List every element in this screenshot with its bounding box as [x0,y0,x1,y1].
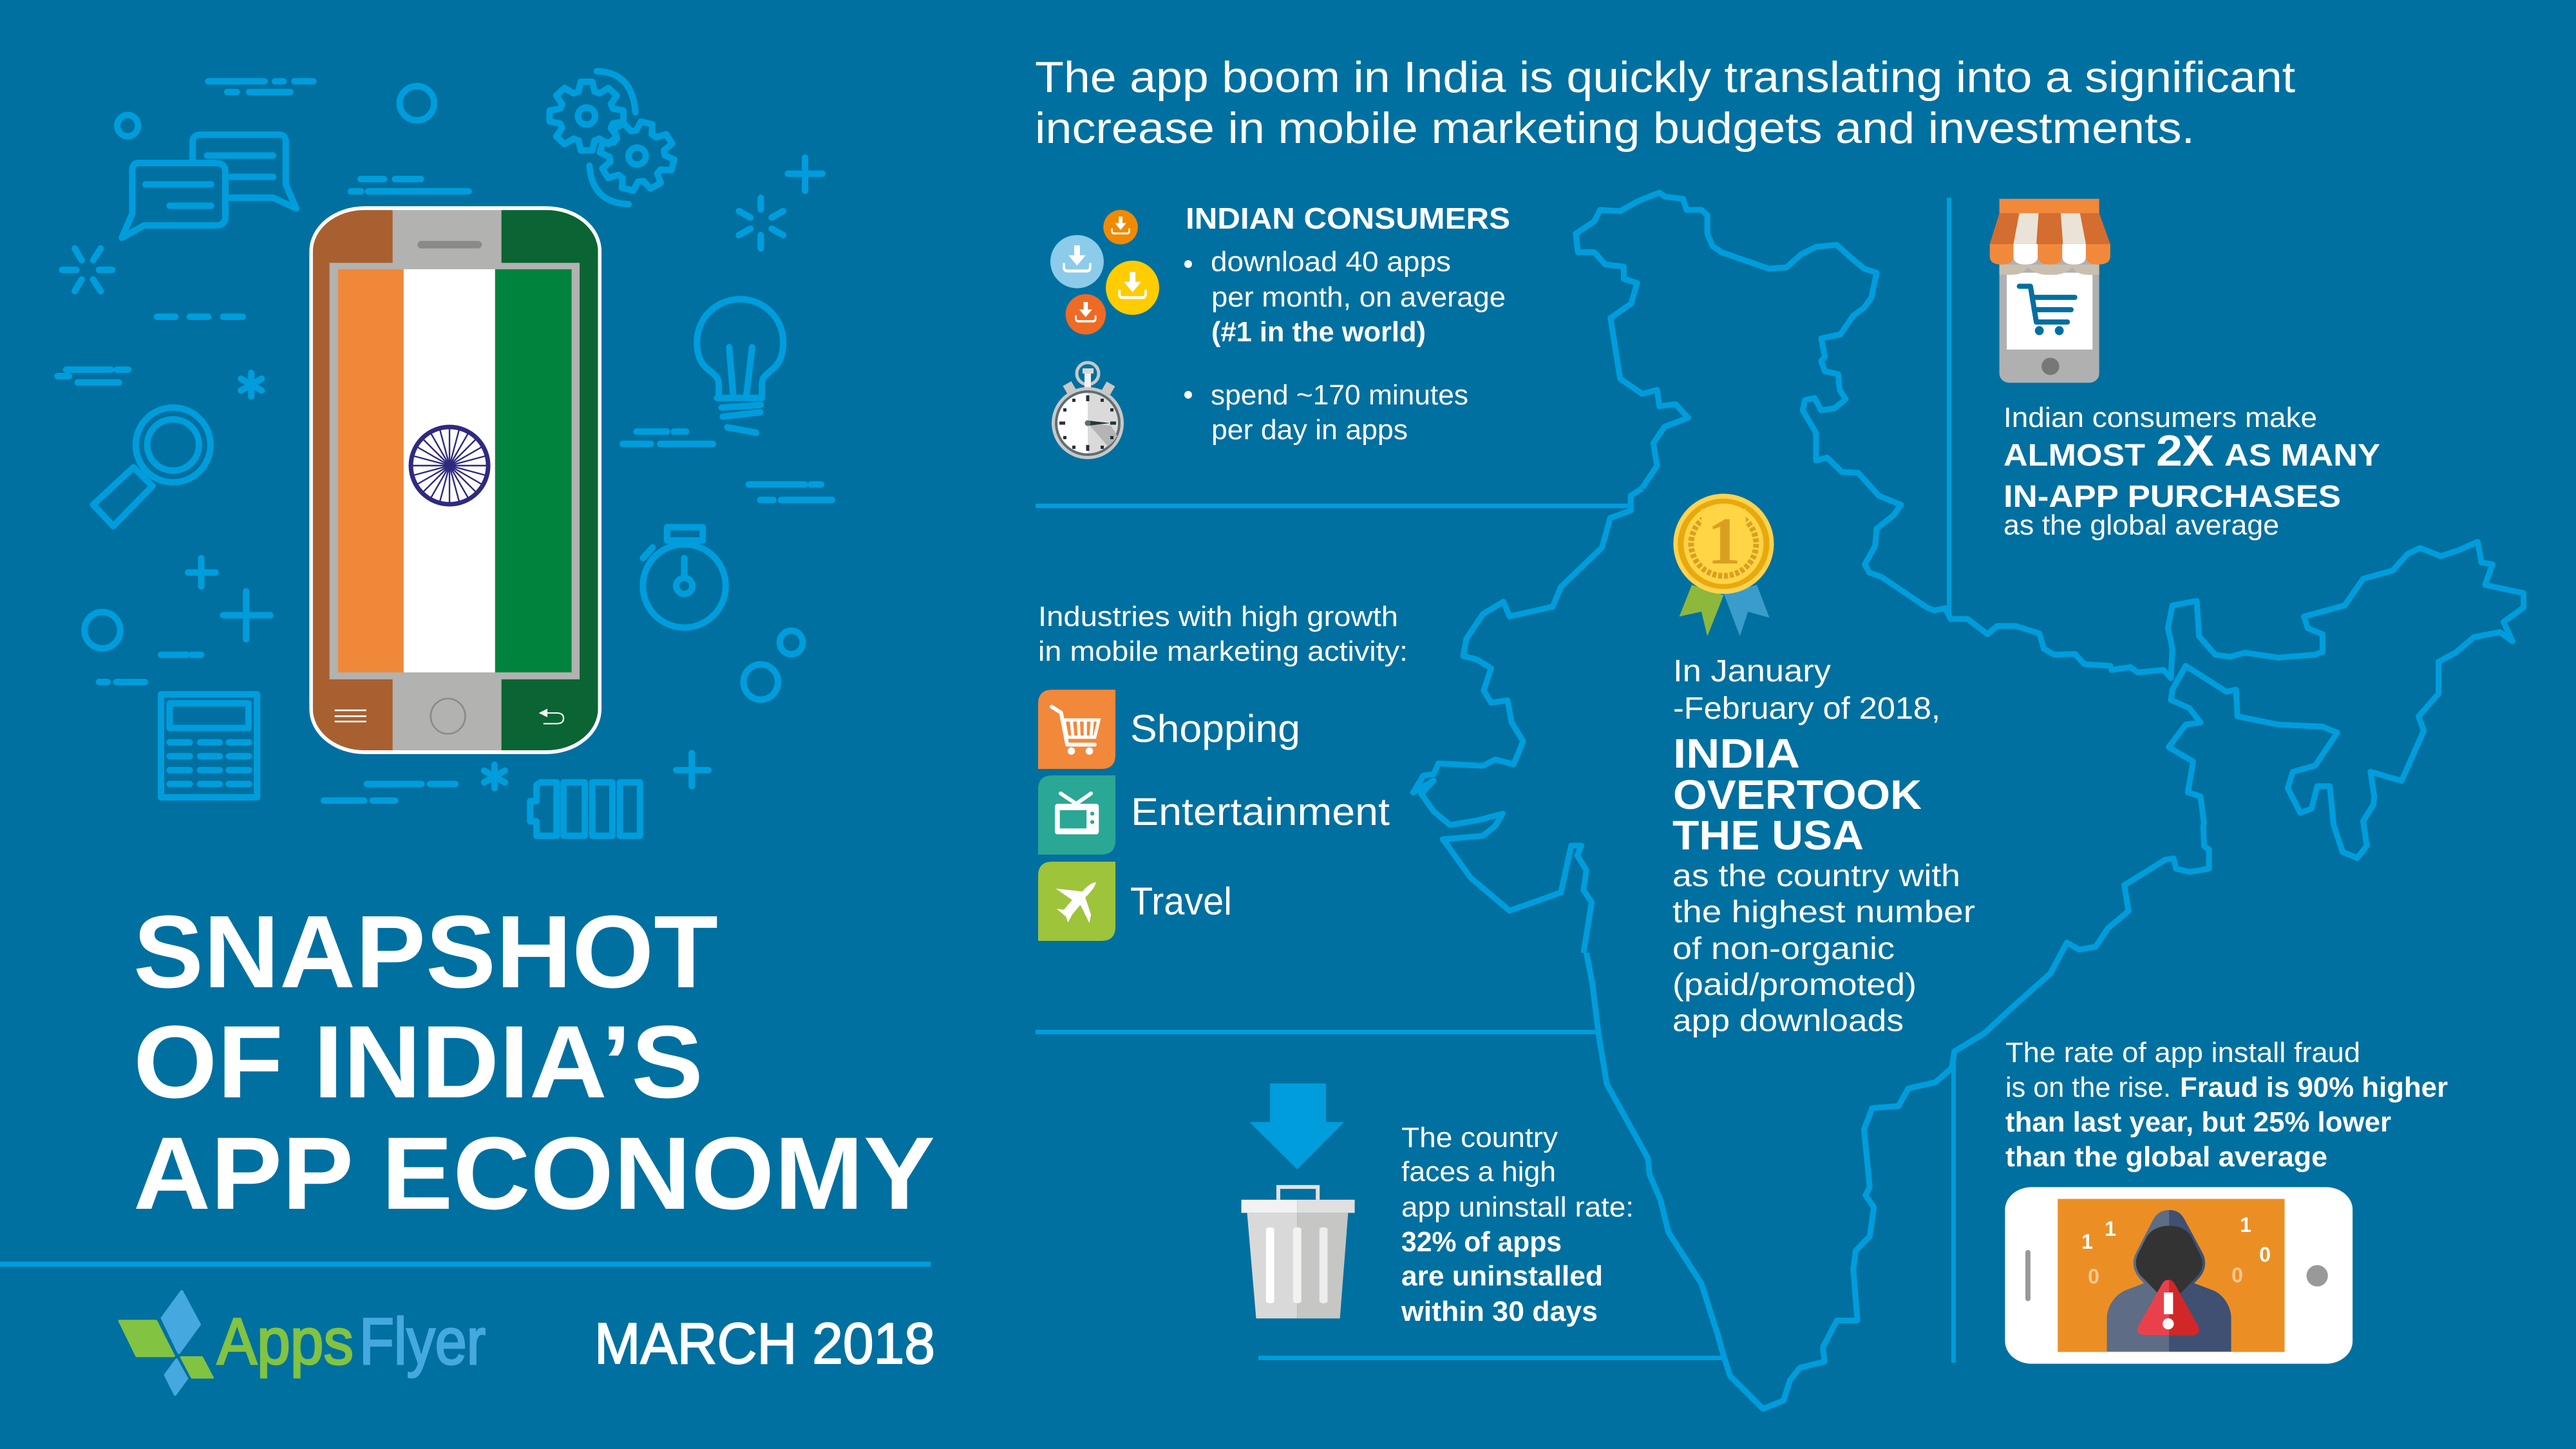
text: India overtook the USA [1672,654,1975,1038]
text: industries intro: in mobile marketing activity: [1038,636,1408,667]
phone with Indian flag [309,206,601,754]
logo wordmark: Apps [217,1305,354,1378]
industry: shopping: Shopping [1130,707,1300,750]
divider lines [0,198,1956,1363]
title [133,894,935,1231]
text: Indian consumers: per month, on average [1211,281,1506,313]
logo mark [120,1291,213,1395]
icon: chat bubbles [122,135,296,238]
decorative dashes, plus signs, circles, sparkles [57,81,832,800]
text: India overtook the USA: In January [1673,654,1831,688]
icon: phone with hacker: 1 [2081,1230,2093,1253]
icon: gears [549,71,683,204]
icon: phone with hacker: 0 [2231,1264,2243,1287]
text: Indian consumers: spend ~170 minutes [1211,379,1468,411]
text: India overtook the USA: of non-organic [1672,932,1895,966]
text: in-app purchases: Indian consumers make [2003,402,2317,433]
text: uninstall rate: 32% of apps [1401,1226,1562,1258]
text: in-app purchases: as the global average [2003,509,2279,541]
headline statement: The app boom in India is quickly translating into a significant [1035,53,2295,102]
map of India outline [1413,193,2524,1409]
text: India overtook the USA: OVERTOOK [1673,772,1922,818]
headline statement: increase in mobile marketing budgets and investments. [1035,104,2195,153]
flag screen [330,263,580,679]
icon: stopwatch outline [643,527,726,627]
line-art icon cloud [57,71,832,836]
phone body [309,206,601,754]
text: uninstall rate: The country [1401,1122,1558,1153]
industry: entertainment: Entertainment [1131,790,1390,833]
industry: shopping [1038,690,1300,769]
icon: light bulb [697,299,783,433]
text: install fraud: than last year, but 25% lower [2005,1106,2391,1138]
title: APP ECONOMY [133,1115,935,1231]
icon: Ashoka Chakra [411,427,488,504]
text: industries intro: Industries with high growth [1038,601,1398,632]
text: uninstall rate: app uninstall rate: [1401,1191,1634,1223]
icon: magnifying glass [93,408,211,526]
text: in-app purchases [2003,402,2380,541]
industry: travel: Travel [1130,880,1232,923]
text: Indian consumers [1184,202,1510,446]
logo wordmark [217,1305,486,1378]
text: install fraud: The rate of app install fraud [2005,1037,2360,1068]
title: OF INDIA’S [133,1004,703,1119]
AppsFlyer logo [120,1291,486,1395]
text: uninstall rate [1401,1122,1634,1327]
text: install fraud [2005,1037,2448,1173]
icon: gold medal [1673,494,1774,636]
text: Indian consumers: per day in apps [1211,414,1408,446]
icon: gold medal: 1 [1707,504,1741,578]
icon: phone with hacker: 0 [2088,1265,2099,1288]
text: India overtook the USA: the highest number [1672,895,1975,929]
headline statement [1035,53,2295,153]
text: Indian consumers: (#1 in the world) [1211,316,1426,348]
icon: download bubbles [1050,210,1159,335]
text: install fraud: than the global average [2005,1141,2327,1173]
text: India overtook the USA: app downloads [1672,1004,1904,1038]
text: uninstall rate: within 30 days [1401,1296,1598,1327]
text: in-app purchases: 2X [2156,426,2214,475]
text: India overtook the USA: INDIA [1673,730,1800,777]
text: Indian consumers: INDIAN CONSUMERS [1186,202,1510,235]
text: in-app purchases: AS MANY [2224,439,2380,473]
text: uninstall rate: faces a high [1401,1156,1556,1188]
text: Indian consumers: download 40 apps [1211,246,1451,278]
date: MARCH 2018 [594,1312,935,1376]
text: uninstall rate: are uninstalled [1401,1260,1603,1292]
text: India overtook the USA: (paid/promoted) [1672,968,1917,1002]
text: India overtook the USA: as the country with [1672,859,1960,893]
icon: phone with hacker [2005,1187,2353,1364]
icon: battery [530,782,640,836]
logo wordmark: Flyer [359,1305,486,1378]
industry: entertainment [1038,775,1390,855]
text: India overtook the USA: THE USA [1672,812,1864,858]
icon: phone with hacker: 1 [2240,1213,2251,1236]
icon: stopwatch [1052,363,1124,459]
text: in-app purchases: IN-APP PURCHASES [2003,480,2341,514]
industry: travel [1038,862,1232,941]
text: install fraud: is on the rise. [2005,1072,2171,1103]
icon: phone with hacker: 0 [2259,1243,2271,1266]
text: in-app purchases: ALMOST [2003,439,2145,473]
icon: calculator [161,694,257,797]
title: SNAPSHOT [133,894,718,1009]
text: India overtook the USA: -February of 2018, [1673,692,1940,726]
icon: phone with hacker: 1 [2105,1217,2116,1240]
text: install fraud: Fraud is 90% higher [2180,1072,2448,1103]
icon: storefront phone [1990,199,2110,383]
icon: arrow into trash can [1242,1083,1355,1318]
text: industries intro [1038,601,1408,667]
